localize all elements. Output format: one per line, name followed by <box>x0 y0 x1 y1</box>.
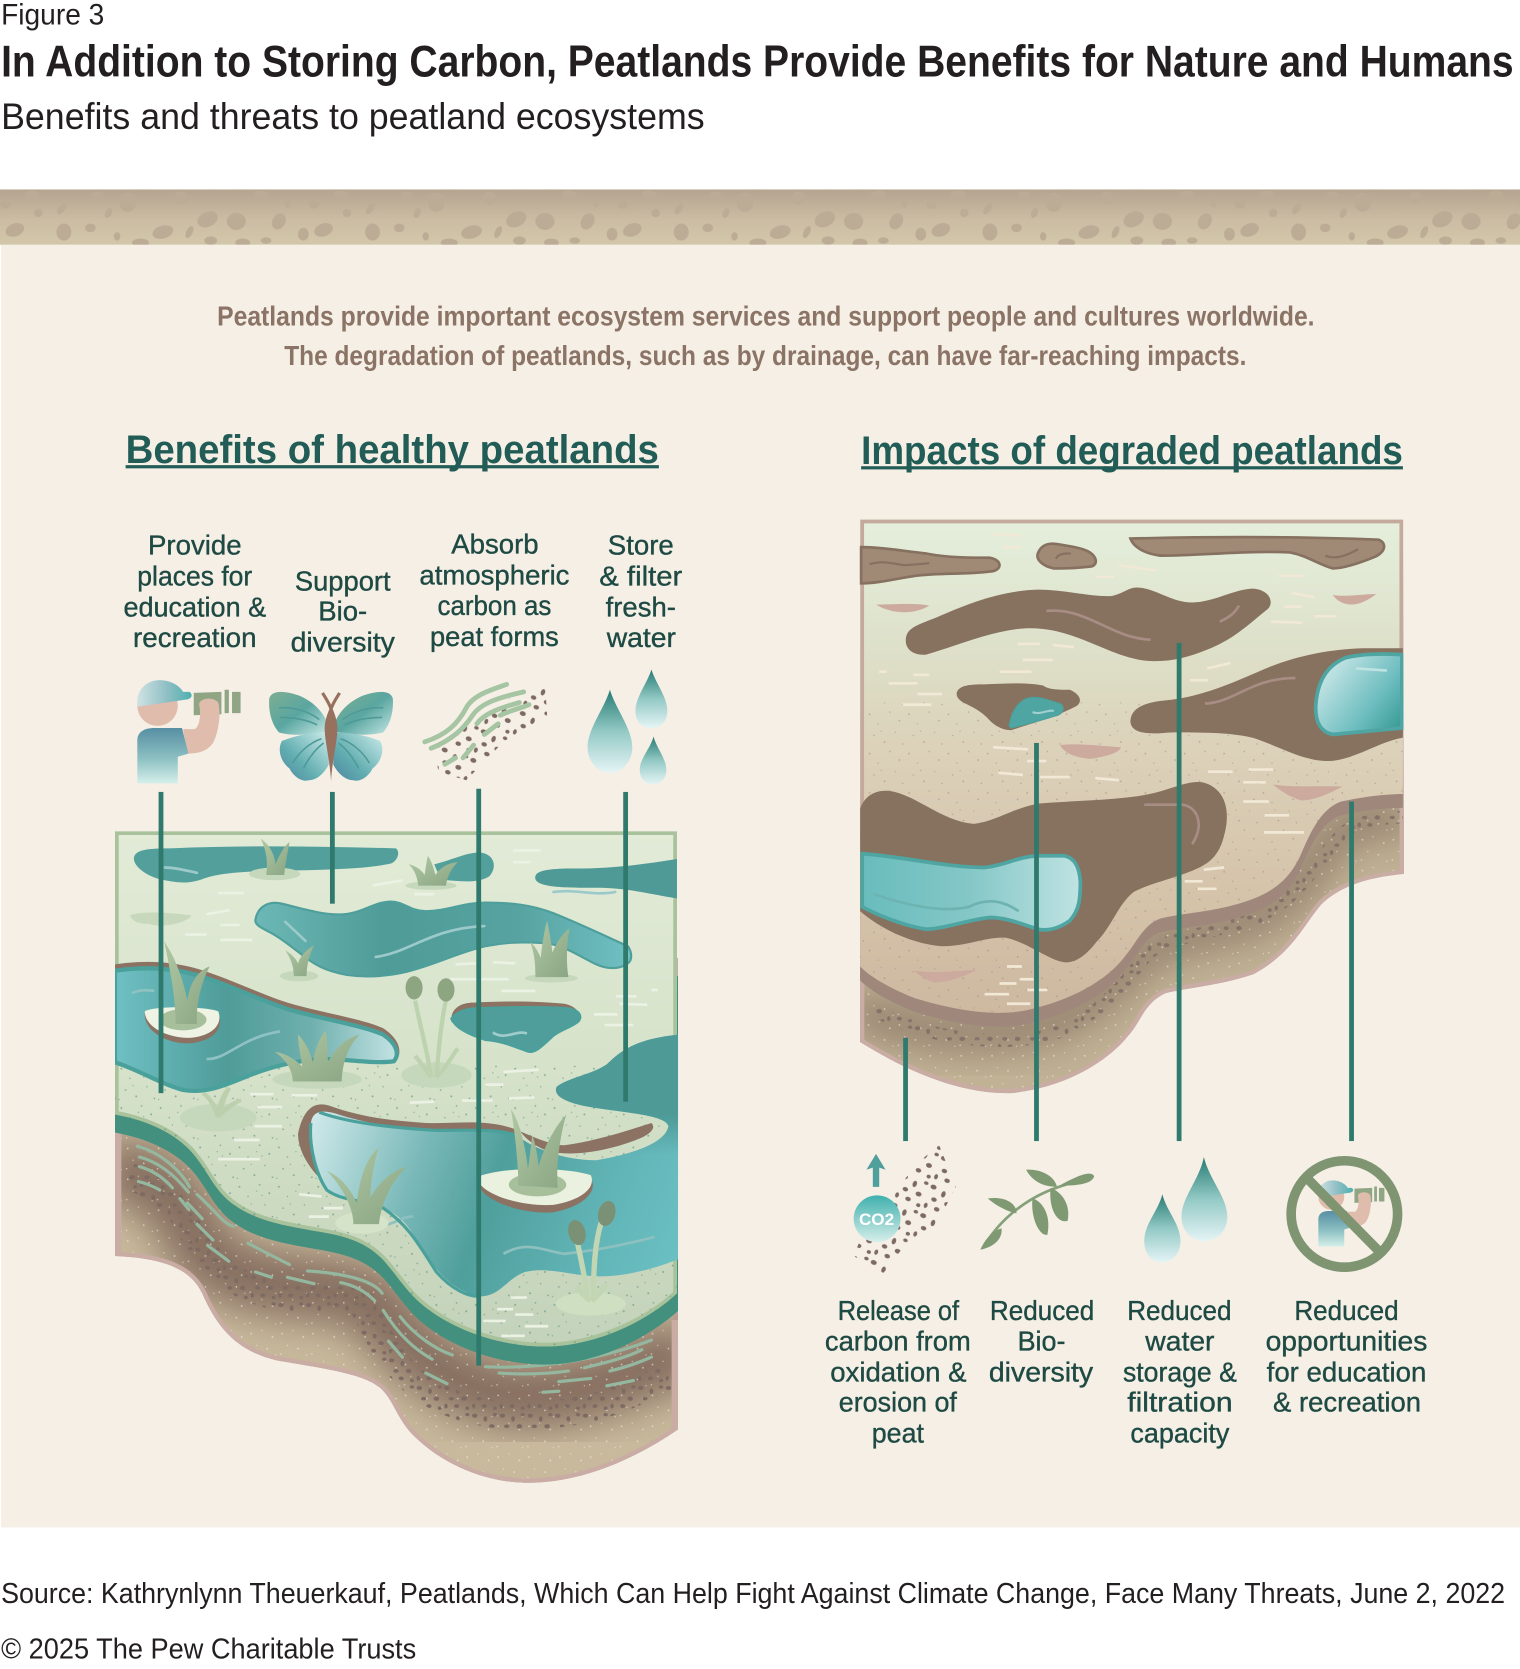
label: education: Provide <box>148 530 242 561</box>
pale dashes <box>879 534 1336 1004</box>
cattail plants <box>406 976 618 1301</box>
label: reduced biodiversity: Reduced <box>990 1295 1094 1326</box>
dried patch: large with water <box>860 782 1227 962</box>
label: reduced water storage: capacity <box>1130 1417 1230 1448</box>
label: freshwater <box>599 530 682 653</box>
label: carbon release: erosion of <box>839 1386 957 1417</box>
label: carbon: Absorb <box>451 528 539 559</box>
icon: peat formation <box>425 683 547 780</box>
pale dashes <box>185 850 658 1336</box>
icon: carbon release: CO2 <box>859 1210 894 1229</box>
surface layer <box>115 831 677 1346</box>
pond: small middle <box>451 1002 580 1052</box>
label: freshwater: Store <box>608 530 674 561</box>
label: biodiversity <box>291 566 395 657</box>
label: freshwater: & filter <box>599 560 682 591</box>
label: reduced recreation: for education <box>1267 1357 1426 1388</box>
label: carbon release: carbon from <box>825 1326 971 1357</box>
label: biodiversity: Support <box>295 566 391 597</box>
label: carbon: atmospheric <box>419 559 570 590</box>
soil texture band <box>0 189 1520 245</box>
pond: top middle <box>434 853 494 881</box>
pink streaks <box>876 594 1376 982</box>
leader lines: benefits <box>159 789 628 1366</box>
icon: reduced water drops <box>1144 1157 1227 1262</box>
label: carbon release: peat <box>872 1417 924 1448</box>
label: carbon release: oxidation & <box>830 1357 967 1388</box>
surface layer <box>860 519 1403 1013</box>
heading: impacts: Impacts of degraded peatlands <box>861 429 1403 473</box>
label: education: recreation <box>133 622 257 653</box>
label: reduced recreation: & recreation <box>1273 1386 1421 1417</box>
label: freshwater: fresh- <box>606 591 676 622</box>
heading: benefits: Benefits of healthy peatlands <box>126 428 659 472</box>
label: reduced water storage: water <box>1144 1326 1215 1357</box>
label: education: education & <box>123 591 267 622</box>
island: lower <box>477 1169 593 1213</box>
pond: top left <box>134 846 398 882</box>
icon: person with binoculars <box>137 680 241 783</box>
label: reduced biodiversity: diversity <box>989 1357 1093 1388</box>
island: left <box>145 1007 220 1043</box>
dried patch: centre <box>906 588 1271 661</box>
label: freshwater: water <box>606 622 676 653</box>
leader lines: impacts <box>903 643 1354 1141</box>
plants <box>164 839 569 1224</box>
label: reduced recreation <box>1266 1295 1427 1417</box>
dried patch: right with water <box>1130 648 1403 761</box>
illustration: degraded peatland cross-section <box>852 519 1410 1096</box>
subtitle: Benefits and threats to peatland ecosystems <box>1 95 705 137</box>
teal band <box>115 976 678 1365</box>
icon: carbon release <box>854 1144 956 1273</box>
label: education <box>123 530 267 653</box>
icon: water drops <box>588 670 667 784</box>
label: carbon: carbon as <box>437 590 551 621</box>
label: reduced biodiversity <box>989 1295 1094 1388</box>
pond: long centre <box>255 902 631 976</box>
dried patch: small with water <box>957 683 1080 730</box>
background panel <box>1 245 1520 1527</box>
icon: branch <box>980 1170 1094 1250</box>
label: reduced water storage <box>1123 1295 1237 1448</box>
copyright: © 2025 The Pew Charitable Trusts <box>1 1633 416 1665</box>
icon: no recreation <box>1291 1161 1398 1267</box>
dried patches: top <box>861 537 1384 583</box>
label: carbon: peat forms <box>430 621 559 652</box>
soil layer <box>852 519 1410 1096</box>
faded puddle <box>130 912 192 926</box>
label: education: places for <box>137 560 252 591</box>
label: biodiversity: Bio- <box>318 596 367 627</box>
label: reduced biodiversity: Bio- <box>1018 1326 1065 1357</box>
label: carbon release: Release of <box>838 1295 959 1326</box>
soil layer <box>106 958 692 1490</box>
icon: butterfly <box>269 692 393 781</box>
pond: left <box>115 962 399 1091</box>
label: reduced water storage: Reduced <box>1127 1295 1232 1326</box>
intro text: The degradation of peatlands, such as by drainage, can have far-reaching impacts. <box>284 340 1246 371</box>
label: carbon release <box>825 1295 971 1448</box>
brown band <box>860 759 1403 1027</box>
label: carbon <box>419 528 570 652</box>
intro text <box>217 301 1315 371</box>
label: reduced recreation: opportunities <box>1266 1326 1427 1357</box>
label: biodiversity: diversity <box>291 626 395 657</box>
cracks <box>1046 606 1295 844</box>
label: reduced water storage: storage & <box>1123 1357 1237 1388</box>
pond: top right <box>535 859 677 898</box>
peat bands <box>137 1146 651 1392</box>
label: reduced recreation: Reduced <box>1294 1295 1399 1326</box>
pond: large lower <box>298 1027 681 1296</box>
label: reduced water storage: filtration <box>1127 1386 1233 1417</box>
plant bases <box>180 867 626 1316</box>
intro text: Peatlands provide important ecosystem services and support people and cultures worldwide. <box>217 301 1315 332</box>
illustration: healthy peatland cross-section <box>106 831 692 1490</box>
